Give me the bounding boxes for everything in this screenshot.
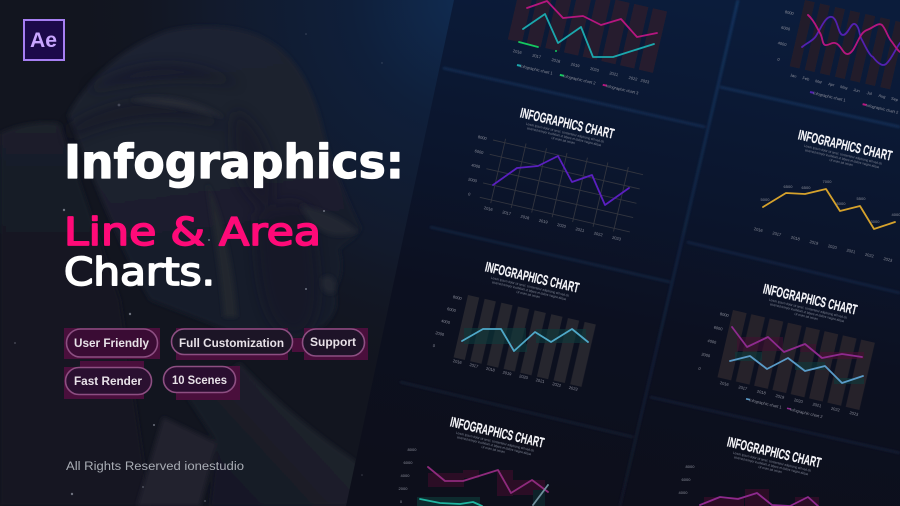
chart: magenta and blue lines on bars: 2000 xyxy=(701,351,711,359)
chart: magenta and blue lines on bars: 2021 xyxy=(812,401,823,409)
title: Line & Area: Line & Area xyxy=(64,210,321,254)
tag: 10 Scenes: 10 Scenes xyxy=(172,375,227,387)
chart: gold line with value labels: 5500 xyxy=(857,196,866,201)
chart: smooth purple and magenta curves: Infographic chart 2 xyxy=(865,102,900,115)
chart: teal and magenta lines on bars: 2017 xyxy=(532,53,542,60)
chart: magenta and blue lines on bars: 2019 xyxy=(775,393,786,400)
chart heading: Ut enim ad minim xyxy=(794,312,818,321)
chart: purple line on grid: 2018 xyxy=(520,214,531,221)
footer credit: All Rights Reserved ionestudio xyxy=(66,461,244,473)
icon: After Effects logo xyxy=(24,20,64,60)
chart: magenta line bottom right: 8000 xyxy=(686,464,695,469)
chart: magenta, teal and grey lines: 2000 xyxy=(399,486,408,491)
tag: Full Customization: Full Customization xyxy=(179,338,284,350)
chart heading: Ut enim ad minim xyxy=(758,465,782,474)
tag: User Friendly xyxy=(64,328,160,359)
chart: blue line on bars: 2021 xyxy=(535,377,546,384)
chart: magenta and blue lines on bars: 8000 xyxy=(719,311,730,318)
title: Infographics: Infographics: xyxy=(64,135,404,189)
chart: blue line on bars: 2019 xyxy=(502,370,513,377)
tag: Full Customization xyxy=(172,328,304,360)
chart: gold line with value labels: 2017 xyxy=(772,230,782,237)
chart heading xyxy=(516,104,616,153)
chart: magenta, teal and grey lines: 4000 xyxy=(401,473,410,478)
chart: purple line on grid xyxy=(464,104,644,242)
chart heading xyxy=(723,433,823,482)
chart heading xyxy=(759,280,859,329)
chart: teal and magenta lines on bars: 2020 xyxy=(590,66,600,73)
chart: gold line with value labels: 2018 xyxy=(790,235,801,242)
chart heading: INFOGRAPHICS CHART xyxy=(484,258,581,296)
chart: teal and magenta lines on bars: Infographic chart 3 xyxy=(606,83,640,96)
chart: blue line on bars: 2020 xyxy=(519,373,529,380)
chart: purple line on grid: 2017 xyxy=(502,209,512,216)
dust particles xyxy=(14,33,383,502)
chart: gold line with value labels: 2022 xyxy=(865,252,875,259)
chart: teal and magenta lines on bars: Infographic chart 2 xyxy=(563,73,597,86)
chart: magenta line bottom right: 6000 xyxy=(682,477,691,482)
chart: smooth purple and magenta curves: Feb xyxy=(802,75,811,82)
chart heading: Ut enim ad minim xyxy=(551,136,575,145)
chart: gold line with value labels: 2020 xyxy=(827,243,838,250)
chart: magenta line bottom right: 4000 xyxy=(679,490,688,495)
chart heading: eiusmod tempor incididunt ut labore et dolore magna aliqua xyxy=(492,280,567,301)
chart heading: Ut enim ad minim xyxy=(516,290,540,299)
chart: teal and magenta lines on bars: 2019 xyxy=(570,61,581,69)
chart heading: Lorem ipsum dolor sit amet, consectetur adipiscing elit sed do xyxy=(456,431,534,453)
chart: smooth purple and magenta curves: 8000 xyxy=(784,9,795,16)
chart panels grid xyxy=(346,0,900,506)
chart: magenta and blue lines on bars xyxy=(698,280,875,419)
chart: blue line on bars: 0 xyxy=(432,343,436,348)
chart heading: INFOGRAPHICS CHART xyxy=(519,104,616,142)
chart: purple line on grid: 8000 xyxy=(477,134,488,141)
chart: magenta, teal and grey lines: 6000 xyxy=(404,460,413,465)
chart: smooth purple and magenta curves: Sep xyxy=(891,96,899,102)
chart: blue line on bars: 4000 xyxy=(441,318,451,325)
chart: teal and magenta lines on bars xyxy=(508,0,667,96)
chart: smooth purple and magenta curves: May xyxy=(840,84,848,91)
chart: magenta and blue lines on bars: 2023 xyxy=(849,410,860,417)
chart: purple line on grid: 2000 xyxy=(468,176,478,184)
chart heading: Lorem ipsum dolor sit amet, consectetur adipiscing elit sed do xyxy=(491,276,569,298)
chart: smooth purple and magenta curves: Jun xyxy=(853,87,860,93)
chart heading: INFOGRAPHICS CHART xyxy=(449,413,546,451)
chart: magenta and blue lines on bars: Infographic chart 2 xyxy=(790,407,824,419)
chart heading: Lorem ipsum dolor sit amet, consectetur adipiscing elit sed do xyxy=(733,451,811,473)
chart: magenta line bottom right xyxy=(679,433,823,506)
tag: Fast Render: Fast Render xyxy=(74,376,143,388)
chart: teal and magenta lines on bars: 2023 xyxy=(640,78,651,85)
chart heading: eiusmod tempor incididunt ut labore et dolore magna aliqua xyxy=(770,302,845,323)
chart: gold line with value labels: 5000 xyxy=(761,197,770,202)
chart heading: eiusmod tempor incididunt ut labore et dolore magna aliqua xyxy=(527,126,602,147)
chart: gold line with value labels: 2021 xyxy=(846,247,857,255)
chart: blue line on bars: 2017 xyxy=(469,362,480,369)
chart: magenta and blue lines on bars: 2018 xyxy=(756,389,767,396)
chart: blue line on bars: 2016 xyxy=(452,358,463,365)
chart: gold line with value labels: 5000 xyxy=(837,201,846,206)
chart: blue line on bars: 6000 xyxy=(447,306,457,313)
chart: gold line with value labels: 6500 xyxy=(784,184,793,189)
chart heading xyxy=(481,258,581,307)
chart: blue line on bars: 2023 xyxy=(568,385,579,392)
chart: magenta, teal and grey lines: 0 xyxy=(400,499,403,504)
chart: smooth purple and magenta curves: Apr xyxy=(828,81,836,88)
chart: magenta and blue lines on bars: 2017 xyxy=(738,384,748,391)
chart: teal and magenta lines on bars: 2018 xyxy=(551,57,562,64)
chart: magenta and blue lines on bars: 6000 xyxy=(713,325,724,332)
chart: teal and magenta lines on bars: 2016 xyxy=(512,48,523,55)
chart heading: Lorem ipsum dolor sit amet, consectetur adipiscing elit sed do xyxy=(804,144,882,166)
feature tags xyxy=(64,328,368,400)
chart: smooth purple and magenta curves: Mar xyxy=(815,78,823,85)
tag: Support xyxy=(302,328,368,360)
statue bust silhouette xyxy=(0,27,403,506)
chart: blue line on bars: 8000 xyxy=(452,294,463,301)
chart heading: eiusmod tempor incididunt ut labore et dolore magna aliqua xyxy=(734,455,809,476)
icon: After Effects logo: Ae xyxy=(30,29,57,52)
tag: 10 Scenes xyxy=(164,366,240,400)
chart: teal and magenta lines on bars: 2021 xyxy=(609,70,619,77)
chart: gold line with value labels xyxy=(753,126,900,263)
chart: magenta and blue lines on bars: 2022 xyxy=(831,406,841,413)
chart heading: INFOGRAPHICS CHART xyxy=(726,433,823,471)
chart: purple line on grid: 2019 xyxy=(538,218,549,225)
tag: Fast Render xyxy=(64,361,152,399)
chart: purple line on grid: 2022 xyxy=(593,230,604,238)
chart: magenta and blue lines on bars: 2016 xyxy=(719,380,730,387)
chart: smooth purple and magenta curves: 0 xyxy=(777,57,781,62)
chart: magenta and blue lines on bars: 4000 xyxy=(707,338,718,345)
chart: teal and magenta lines on bars: 2022 xyxy=(628,75,639,82)
chart: gold line with value labels: 2023 xyxy=(883,256,894,263)
chart: purple line on grid: 2023 xyxy=(612,235,622,242)
chart: purple line on grid: 2020 xyxy=(557,222,567,229)
chart: magenta, teal and grey lines xyxy=(399,413,548,506)
chart: smooth purple and magenta curves: Aug xyxy=(878,93,886,99)
chart: smooth purple and magenta curves: Infographic chart 1 xyxy=(813,90,847,103)
chart: blue line on bars: 2022 xyxy=(552,381,562,388)
title: Charts: Charts. xyxy=(64,250,215,294)
chart heading: Ut enim ad minim xyxy=(829,158,853,167)
chart: gold line with value labels: 2016 xyxy=(753,226,764,233)
chart: gold line with value labels: 6500 xyxy=(802,185,811,190)
chart: blue line on bars: 2018 xyxy=(486,366,496,373)
chart: smooth purple and magenta curves: Jul xyxy=(866,90,872,96)
chart: smooth purple and magenta curves: 6000 xyxy=(781,25,791,32)
chart heading: Ut enim ad minim xyxy=(481,445,505,454)
chart heading: eiusmod tempor incididunt ut labore et dolore magna aliqua xyxy=(805,148,880,169)
chart: purple line on grid: 0 xyxy=(468,191,472,197)
chart: smooth purple and magenta curves: Jan xyxy=(790,72,797,79)
chart: purple line on grid: 2016 xyxy=(483,205,494,212)
chart: purple line on grid: 4000 xyxy=(471,162,481,169)
tag: Support: Support xyxy=(310,337,356,349)
chart: purple line on grid: 2021 xyxy=(575,226,586,233)
chart heading: Lorem ipsum dolor sit amet, consectetur adipiscing elit sed do xyxy=(526,122,604,144)
chart: smooth purple and magenta curves xyxy=(774,0,900,115)
chart heading xyxy=(446,413,546,462)
chart: gold line with value labels: 2019 xyxy=(809,239,820,246)
chart: magenta and blue lines on bars: 2020 xyxy=(793,397,804,404)
tag: User Friendly: User Friendly xyxy=(74,338,150,350)
chart: magenta, teal and grey lines: 8000 xyxy=(408,447,417,452)
chart: smooth purple and magenta curves: 4000 xyxy=(777,40,788,47)
chart heading: eiusmod tempor incididunt ut labore et dolore magna aliqua xyxy=(457,435,532,456)
chart: magenta and blue lines on bars: 0 xyxy=(698,366,702,371)
chart: blue line on bars: 2000 xyxy=(435,330,445,337)
chart: purple line on grid: 6000 xyxy=(474,148,485,155)
chart heading: Lorem ipsum dolor sit amet, consectetur adipiscing elit sed do xyxy=(769,298,847,320)
chart: gold line with value labels: 3000 xyxy=(871,219,880,224)
chart: gold line with value labels: 7000 xyxy=(823,179,832,184)
chart: blue line on bars xyxy=(432,258,596,392)
chart: magenta and blue lines on bars: Infographic chart 1 xyxy=(749,397,783,410)
chart: teal and magenta lines on bars: Infographic chart 1 xyxy=(520,63,554,76)
